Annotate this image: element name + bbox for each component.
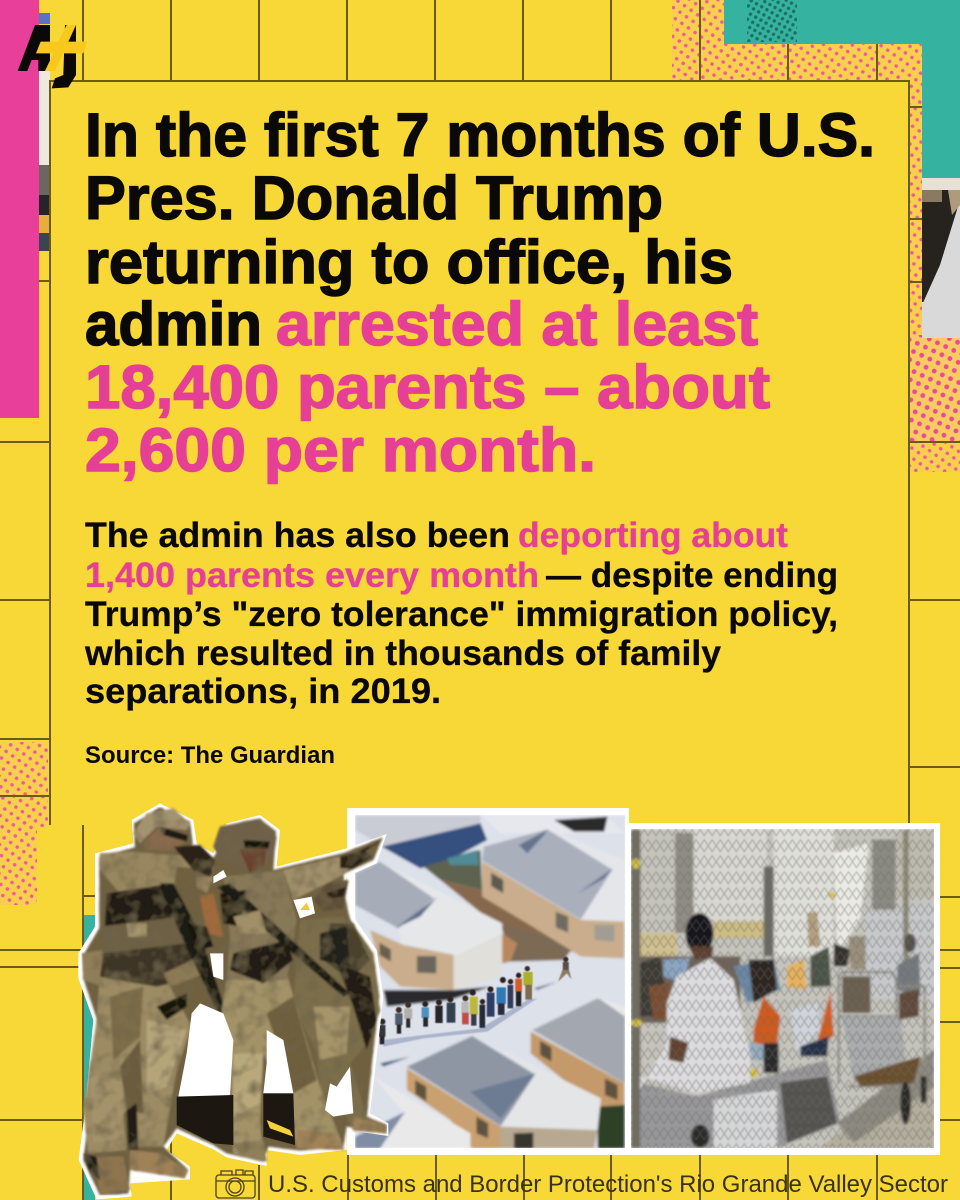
- body text: Trump’s "zero tolerance" immigration policy,: [85, 594, 838, 634]
- tent D: [407, 1068, 501, 1148]
- heading: [85, 101, 875, 484]
- tent E: [355, 1077, 470, 1148]
- white cut-out outline: [78, 803, 388, 1199]
- collage fragment: right photo scrap: [922, 178, 960, 338]
- heading: Pres. Donald Trump: [85, 164, 663, 232]
- cut-out gaps: [178, 870, 353, 1117]
- camera icon: [216, 1170, 255, 1198]
- logo: AJ+: [18, 25, 87, 88]
- heading: In the first 7 months of U.S.: [85, 101, 875, 169]
- body text: [84, 515, 838, 711]
- body text: deporting about: [518, 515, 788, 555]
- bags: [640, 1060, 840, 1148]
- panel: main text card: [50, 81, 909, 825]
- people line: [379, 957, 571, 1047]
- pink block: [0, 0, 39, 418]
- heading: 18,400 parents – about: [85, 353, 770, 421]
- soldiers cut-out: [78, 803, 388, 1199]
- collage fragment: left strip: [39, 13, 50, 251]
- heading: arrested at least: [276, 290, 758, 358]
- third soldier: [293, 880, 387, 1133]
- tent B: [482, 862, 624, 958]
- body text: 1,400 parents every month: [85, 555, 539, 595]
- photo: detention fence: [625, 823, 940, 1155]
- left soldier: [82, 808, 233, 1195]
- body text: which resulted in thousands of family: [84, 633, 721, 673]
- heading: 2,600 per month.: [85, 416, 596, 484]
- middle soldier: [213, 818, 383, 1162]
- photo credit: U.S. Customs and Border Protection's Rio Grande Valley Sector: [268, 1171, 948, 1198]
- source: Source: The Guardian: [85, 742, 335, 769]
- heading: returning to office, his: [85, 228, 733, 296]
- body text: separations, in 2019.: [85, 671, 441, 711]
- seated man: [640, 958, 750, 1093]
- ground shadow: [177, 903, 310, 1145]
- tent C: [531, 1032, 624, 1110]
- body text: — despite ending: [546, 555, 838, 595]
- base silhouette: [83, 807, 385, 1195]
- body text: The admin has also been: [85, 515, 510, 555]
- photo: tents: [347, 808, 629, 1155]
- heading: admin: [85, 290, 262, 358]
- tent A: [370, 930, 454, 990]
- cart: [839, 972, 925, 1090]
